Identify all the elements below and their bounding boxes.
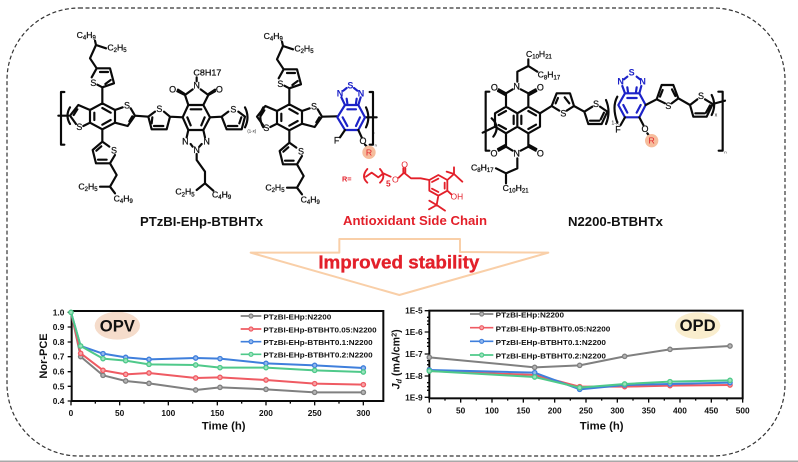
bithiophene right: n: [724, 149, 727, 154]
bithiophene right: x: [715, 112, 718, 118]
naphthalene diimide core: 10: [509, 189, 516, 195]
second BDT unit: S: [311, 102, 317, 112]
blue BTBHT unit: N: [617, 77, 624, 87]
axes: [429, 311, 743, 398]
bottom edge line: [0, 460, 798, 462]
antioxidant side chain structure: O: [392, 175, 399, 185]
second BDT unit: H: [273, 31, 280, 41]
y-axis ticks: 1E-9: [405, 393, 423, 403]
naphthalene diimide core: 8: [544, 75, 548, 81]
blue BTBHT unit: O: [359, 136, 366, 146]
thiophene linker left: [148, 104, 183, 129]
TzBI core: N: [193, 145, 200, 155]
blue BTBHT unit: N: [358, 88, 364, 98]
bithiophene left: [540, 93, 619, 126]
x-axis ticks: 400: [673, 405, 687, 415]
TzBI core: N: [182, 136, 189, 146]
second BDT unit: 2: [301, 49, 305, 55]
antioxidant side chain structure: [342, 160, 463, 211]
first BDT unit: H: [123, 193, 130, 203]
legend: [470, 311, 610, 361]
y-axis ticks: 0.8: [53, 337, 65, 347]
y axis title: J: [390, 382, 402, 389]
y-axis ticks: 0.6: [53, 367, 65, 377]
x axis title: Time (h): [202, 420, 246, 432]
OPV bubble: OPV: [100, 316, 135, 335]
series blue: [427, 368, 732, 391]
second BDT unit: H: [304, 43, 310, 53]
second BDT unit: 9: [317, 200, 321, 206]
naphthalene diimide core: [471, 49, 561, 195]
first BDT unit: [67, 30, 148, 205]
legend: PTzBI-EHp-BTBHT0.1:N2200: [263, 338, 373, 347]
polymer outer brackets: [58, 92, 377, 145]
blue BTBHT unit: N: [639, 77, 646, 87]
naphthalene diimide core: H: [516, 183, 522, 193]
x-axis ticks: 350: [642, 405, 656, 415]
x axis title: Time (h): [580, 420, 624, 432]
naphthalene diimide core: O: [537, 82, 544, 92]
naphthalene diimide core: O: [490, 148, 497, 158]
TzBI core: [169, 67, 232, 201]
chart: OPV Nor-PCE vs time: [38, 307, 383, 432]
x-axis ticks: 0: [427, 405, 432, 415]
bithiophene right: S: [665, 101, 671, 111]
second BDT unit: 4: [270, 37, 274, 43]
naphthalene diimide core: 17: [554, 75, 561, 81]
naphthalene diimide core: 21: [522, 189, 529, 195]
bithiophene left: 1-x: [611, 120, 619, 126]
TzBI core: H: [222, 189, 228, 199]
second BDT unit: H: [275, 182, 281, 192]
second BDT unit: 5: [310, 49, 314, 55]
bithiophene right: [646, 85, 727, 154]
series gray: [427, 344, 732, 369]
x-axis ticks: 100: [161, 408, 176, 418]
legend: PTzBI-EHp-BTBHT0.1:N2200: [496, 338, 606, 347]
legend: PTzBI-EHp-BTBHT0.05:N2200: [496, 324, 610, 333]
blue BTBHT unit: [615, 68, 658, 147]
y-axis ticks: [405, 306, 423, 403]
series green: [69, 310, 365, 374]
thiophene linker right: (1-x): [247, 129, 257, 134]
molecule: N2200-BTBHTx: [471, 49, 727, 195]
TzBI core: C: [175, 187, 182, 197]
naphthalene diimide core: C: [503, 183, 509, 193]
blue BTBHT unit: n: [375, 143, 377, 148]
legend: PTzBI-EHp-BTBHT0.2:N2200: [263, 351, 373, 360]
naphthalene diimide core: H: [539, 49, 545, 59]
first BDT unit: C: [107, 42, 114, 52]
first BDT unit: 2: [85, 187, 89, 193]
x-axis ticks: 150: [516, 405, 531, 415]
arrow: improved stability: Improved stability: [318, 251, 480, 272]
blue BTBHT unit: [334, 80, 377, 159]
x-axis ticks: 250: [579, 405, 593, 415]
x-axis ticks: 250: [308, 408, 322, 418]
y axis title: 2: [389, 333, 398, 337]
first BDT unit: S: [76, 122, 82, 132]
TzBI core: 2: [182, 192, 186, 198]
TzBI core: 5: [191, 192, 195, 198]
second BDT unit: S: [263, 123, 269, 133]
naphthalene diimide core: C: [538, 70, 544, 80]
x-axis ticks: 150: [210, 408, 225, 418]
x-axis ticks: 300: [356, 408, 371, 418]
first BDT unit: S: [111, 146, 117, 156]
second BDT unit: 2: [272, 188, 276, 194]
compound name: PTzBI-EHp-BTBHTx: PTzBI-EHp-BTBHTx: [140, 214, 264, 229]
x-axis ticks: [427, 405, 750, 415]
second BDT unit: 5: [281, 188, 285, 194]
x-axis ticks: 50: [115, 408, 125, 418]
TzBI core: N: [193, 81, 200, 91]
antioxidant side chain structure: O: [401, 160, 408, 170]
TzBI core: H: [185, 187, 191, 197]
second BDT unit: 4: [307, 200, 311, 206]
x-axis ticks: 200: [548, 405, 562, 415]
x-axis ticks: 200: [259, 408, 273, 418]
blue BTBHT unit: S: [629, 68, 635, 78]
TzBI core: O: [216, 84, 223, 94]
series red: [429, 371, 732, 389]
antioxidant label: Antioxidant Side Chain: [343, 213, 487, 228]
OPV bubble: [95, 312, 140, 340]
blue BTBHT unit: N: [337, 88, 343, 98]
x-axis ticks: 50: [456, 405, 466, 415]
y axis title: ): [390, 329, 402, 333]
naphthalene diimide core: H: [547, 70, 554, 80]
series gray: [71, 312, 365, 394]
second BDT unit: C: [265, 182, 272, 192]
first BDT unit: 4: [83, 36, 87, 42]
naphthalene diimide core: 21: [545, 55, 553, 61]
first BDT unit: S: [90, 78, 96, 88]
polymer brackets: [483, 92, 725, 151]
y-axis ticks: 0.9: [53, 322, 65, 332]
first BDT unit: 9: [93, 36, 97, 42]
second BDT unit: S: [277, 79, 283, 89]
first BDT unit: S: [124, 101, 130, 111]
first BDT unit: 5: [123, 48, 127, 54]
second BDT unit: [257, 31, 337, 206]
naphthalene diimide core: 17: [487, 168, 494, 174]
series green: [427, 369, 732, 390]
thiophene linker right: S: [230, 105, 236, 115]
naphthalene diimide core: 8: [477, 168, 481, 174]
compound name: N2200-BTBHTx: N2200-BTBHTx: [568, 214, 664, 229]
thiophene linker right: [210, 105, 263, 134]
OPD bubble: OPD: [680, 316, 716, 335]
antioxidant side chain structure: R=: [342, 175, 352, 184]
bithiophene left: S: [593, 99, 599, 109]
second BDT unit: C: [294, 43, 301, 53]
TzBI core: N: [203, 136, 210, 146]
molecule: PTzBI-EHp-BTBHTx: [58, 30, 377, 206]
x-axis ticks: 500: [736, 405, 750, 415]
chart: OPD dark current vs time: [389, 306, 750, 432]
second BDT unit: H: [310, 194, 317, 204]
first BDT unit: 2: [114, 48, 118, 54]
arrow: improved stability: [251, 239, 548, 295]
first BDT unit: H: [117, 42, 123, 52]
legend: [241, 312, 377, 360]
naphthalene diimide core: H: [481, 162, 487, 172]
y-axis ticks: 1E-5: [405, 306, 423, 316]
OPD bubble: [675, 312, 720, 339]
TzBI core: C: [212, 189, 218, 199]
x-axis ticks: 100: [485, 405, 499, 415]
naphthalene diimide core: 10: [532, 55, 540, 61]
y-axis ticks: [53, 307, 65, 406]
naphthalene diimide core: O: [491, 82, 498, 92]
second BDT unit: C: [264, 31, 270, 41]
naphthalene diimide core: N: [513, 82, 520, 92]
y-axis ticks: 1E-8: [405, 371, 423, 381]
y-axis ticks: 0.5: [53, 381, 65, 391]
y-axis ticks: 1.0: [53, 307, 65, 317]
legend: PTzBI-EHp-BTBHT0.05:N2200: [263, 325, 377, 334]
TzBI core: 9: [228, 195, 232, 201]
legend: PTzBI-EHp:N2200: [263, 312, 331, 321]
second BDT unit: C: [301, 194, 307, 204]
x-axis ticks: 300: [610, 405, 625, 415]
first BDT unit: H: [88, 181, 94, 191]
first BDT unit: 5: [94, 187, 98, 193]
first BDT unit: 4: [120, 199, 124, 205]
bithiophene right: S: [698, 91, 704, 101]
legend: PTzBI-EHp-BTBHT0.2:N2200: [496, 352, 606, 361]
TzBI core: O: [169, 84, 176, 94]
first BDT unit: H: [86, 30, 93, 40]
blue BTBHT unit: x: [373, 130, 375, 135]
R highlight: [362, 146, 376, 159]
blue BTBHT unit: F: [334, 135, 340, 145]
blue BTBHT unit: O: [641, 124, 648, 134]
blue BTBHT unit: S: [347, 80, 353, 90]
blue BTBHT unit: F: [615, 125, 621, 135]
antioxidant side chain structure: 5: [386, 179, 391, 189]
first BDT unit: C: [78, 181, 85, 191]
second BDT unit: 9: [280, 37, 284, 43]
TzBI core: 4: [218, 195, 222, 201]
first BDT unit: C: [114, 193, 120, 203]
y-axis ticks: 1E-7: [405, 349, 423, 359]
y axis title: (mA/cm: [390, 337, 402, 379]
y-axis ticks: 1E-6: [405, 327, 423, 337]
x-axis ticks: 450: [704, 405, 719, 415]
x-axis ticks: [69, 408, 371, 418]
y-axis ticks: 0.4: [53, 396, 65, 406]
first BDT unit: 9: [130, 199, 134, 205]
y axis title: d: [394, 378, 403, 383]
TzBI core: C8H17: [193, 67, 222, 77]
first BDT unit: C: [77, 30, 83, 40]
naphthalene diimide core: C: [526, 49, 532, 59]
x-axis ticks: 0: [69, 408, 74, 418]
naphthalene diimide core: O: [537, 148, 544, 158]
y-axis ticks: 0.7: [53, 352, 65, 362]
bithiophene left: S: [560, 108, 566, 118]
series red: [71, 312, 365, 387]
thiophene linker left: S: [156, 104, 162, 114]
R highlight: [645, 134, 658, 147]
naphthalene diimide core: N: [513, 148, 520, 158]
series blue: [71, 312, 365, 370]
antioxidant side chain structure: OH: [451, 191, 463, 201]
second BDT unit: S: [298, 147, 304, 157]
naphthalene diimide core: C: [471, 162, 477, 172]
blue BTBHT unit: R: [649, 136, 655, 146]
legend: PTzBI-EHp:N2200: [496, 311, 564, 320]
axes: [72, 311, 383, 401]
y axis title: Nor-PCE: [38, 333, 50, 379]
blue BTBHT unit: R: [366, 147, 372, 157]
